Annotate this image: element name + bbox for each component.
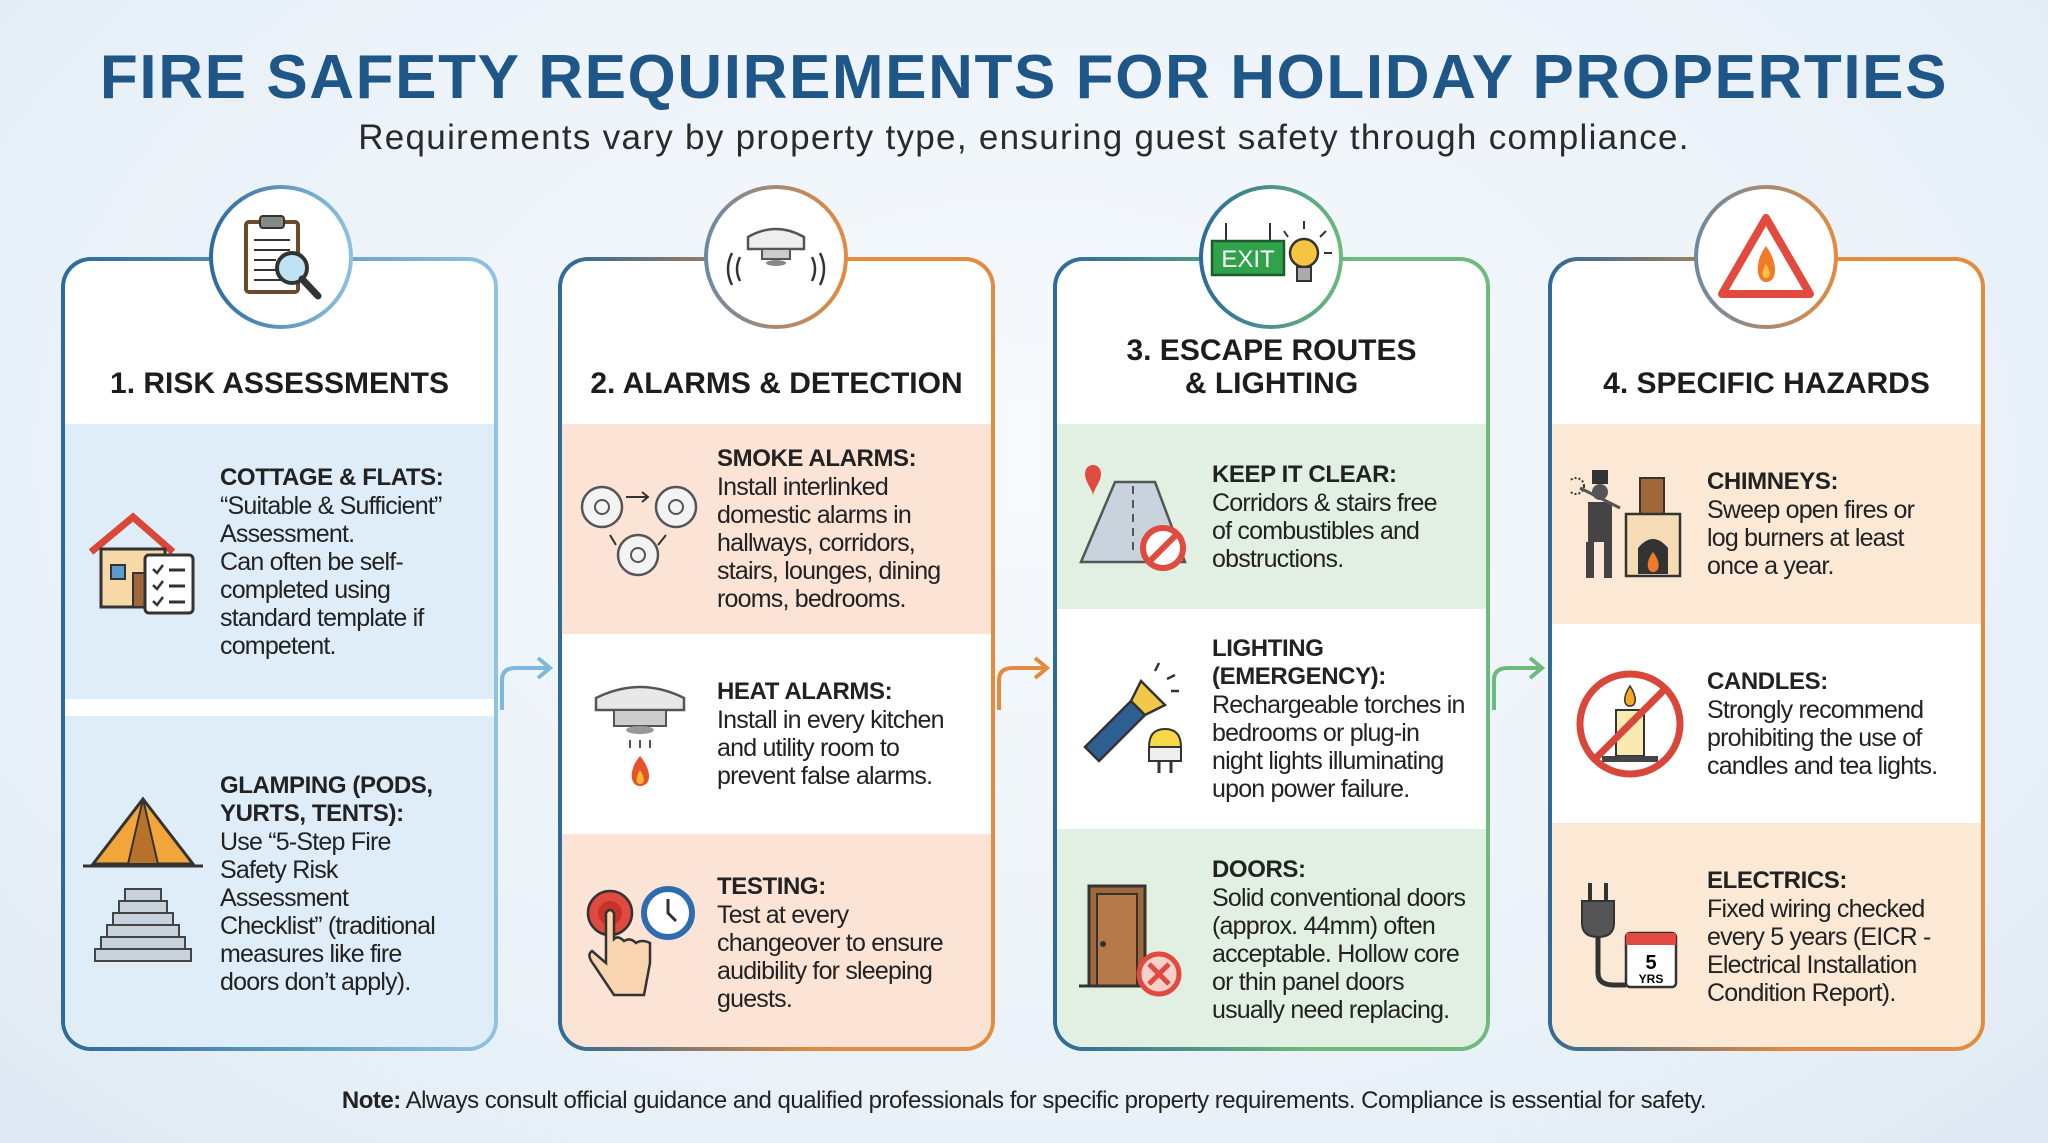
heading: specific hazards: 4. SPECIFIC HAZARDS [1603, 367, 1930, 400]
footnote: Note: Always consult official guidance and qualified professionals for specific property requirements. Compliance is essential for safety. [342, 1087, 1706, 1114]
icon: heat alarm [594, 686, 686, 786]
icon: door with cross [1079, 884, 1182, 996]
text: smoke alarms: SMOKE ALARMS: [717, 445, 916, 472]
panel: escape routes [1053, 257, 1490, 1051]
arrow: panel 1 to 2 [500, 656, 553, 710]
icon: plug and calendar: YRS [1638, 972, 1663, 986]
heading: escape routes [1126, 334, 1417, 400]
row: lighting [1057, 609, 1486, 829]
icon: house with checklist [88, 512, 194, 614]
text: cottage & flats [220, 464, 443, 660]
heading: escape routes: 3. ESCAPE ROUTES [1126, 334, 1417, 367]
icon: test button and clock [586, 886, 695, 996]
title: FIRE SAFETY REQUIREMENTS FOR HOLIDAY PROPERTIES [100, 43, 1948, 112]
text: doors: DOORS: [1212, 856, 1306, 883]
text: lighting: LIGHTING (EMERGENCY): [1212, 635, 1386, 690]
text: testing: TESTING: [717, 872, 826, 900]
icon: tent and steps [83, 796, 203, 962]
row: keep it clear [1057, 424, 1486, 609]
icon circle: exit sign and bulb [1199, 185, 1343, 329]
heading: alarms: 2. ALARMS & DETECTION [590, 367, 963, 400]
text: doors: Solid conventional doors (approx. 44mm) often acceptable. Hollow core or thin panel doors usually need replacing. [1212, 884, 1465, 1024]
panel: specific hazards [1548, 257, 1985, 1051]
text: cottage & flats: Can often be self-completed using standard template if competent. [220, 548, 424, 660]
icon: chimney sweep [1570, 470, 1682, 578]
text: electrics: ELECTRICS: [1707, 867, 1847, 894]
subtitle: Requirements vary by property type, ensuring guest safety through compliance. [358, 118, 1690, 157]
icon: corridor no entry [1079, 465, 1187, 571]
text: cottage & flats: “Suitable & Sufficient” Assessment. [220, 492, 442, 548]
row: cottage & flats [65, 424, 494, 699]
row: candles [1552, 624, 1981, 823]
text: candles: CANDLES: [1707, 668, 1828, 694]
text: keep it clear: Corridors & stairs free of combustibles and obstructions. [1212, 488, 1437, 572]
text: smoke alarms: Install interlinked domestic alarms in hallways, corridors, stairs, lounges, dining rooms, bedrooms. [717, 473, 940, 613]
arrow: panel 2 to 3 [997, 656, 1050, 710]
row: electrics [1552, 823, 1981, 1051]
row: smoke alarms [562, 424, 991, 634]
panel: risk assessments [61, 257, 498, 1051]
text: glamping: Use “5-Step Fire Safety Risk Assessment Checklist” (traditional measures like fire doors don’t apply). [220, 828, 435, 996]
text: testing: Test at every changeover to ensure audibility for sleeping guests. [717, 900, 943, 1012]
text: cottage & flats: COTTAGE & FLATS: [220, 464, 443, 490]
row: testing [562, 834, 991, 1051]
heading: risk assessments: 1. RISK ASSESSMENTS [110, 367, 449, 400]
text: electrics: Fixed wiring checked every 5 years (EICR - Electrical Installation Condition Report). [1707, 895, 1931, 1007]
text: lighting [1212, 635, 1465, 803]
icon: plug and calendar: 5 [1645, 952, 1656, 974]
icon circle: clipboard magnifier [209, 185, 353, 329]
text: keep it clear: KEEP IT CLEAR: [1212, 460, 1397, 488]
icon: plug and calendar [1581, 883, 1678, 988]
row: doors [1057, 829, 1486, 1051]
icon circle: fire warning triangle [1694, 185, 1838, 329]
icon circle: exit sign and bulb: EXIT [1221, 246, 1275, 273]
row: glamping [65, 716, 494, 1051]
heading: escape routes: & LIGHTING [1185, 367, 1358, 400]
text: heat alarms: Install in every kitchen and utility room to prevent false alarms. [717, 706, 944, 790]
text: glamping: GLAMPING (PODS, YURTS, TENTS): [220, 772, 433, 826]
icon: torch and night light [1083, 662, 1182, 773]
text: heat alarms: HEAT ALARMS: [717, 678, 892, 705]
icon circle: smoke detector [704, 185, 848, 329]
text: chimneys: Sweep open fires or log burners at least once a year. [1707, 496, 1914, 580]
panel: alarms & detection [558, 257, 995, 1051]
text: candles: Strongly recommend prohibiting the use of candles and tea lights. [1707, 696, 1937, 780]
icon: no candles [1576, 670, 1684, 778]
row: heat alarms [562, 634, 991, 834]
text: chimneys: CHIMNEYS: [1707, 468, 1838, 495]
arrow: panel 3 to 4 [1492, 656, 1545, 710]
icon: interlinked alarms [580, 486, 698, 576]
text: lighting: Rechargeable torches in bedrooms or plug-in night lights illuminating upon power failure. [1212, 691, 1465, 803]
row: chimneys [1552, 424, 1981, 624]
